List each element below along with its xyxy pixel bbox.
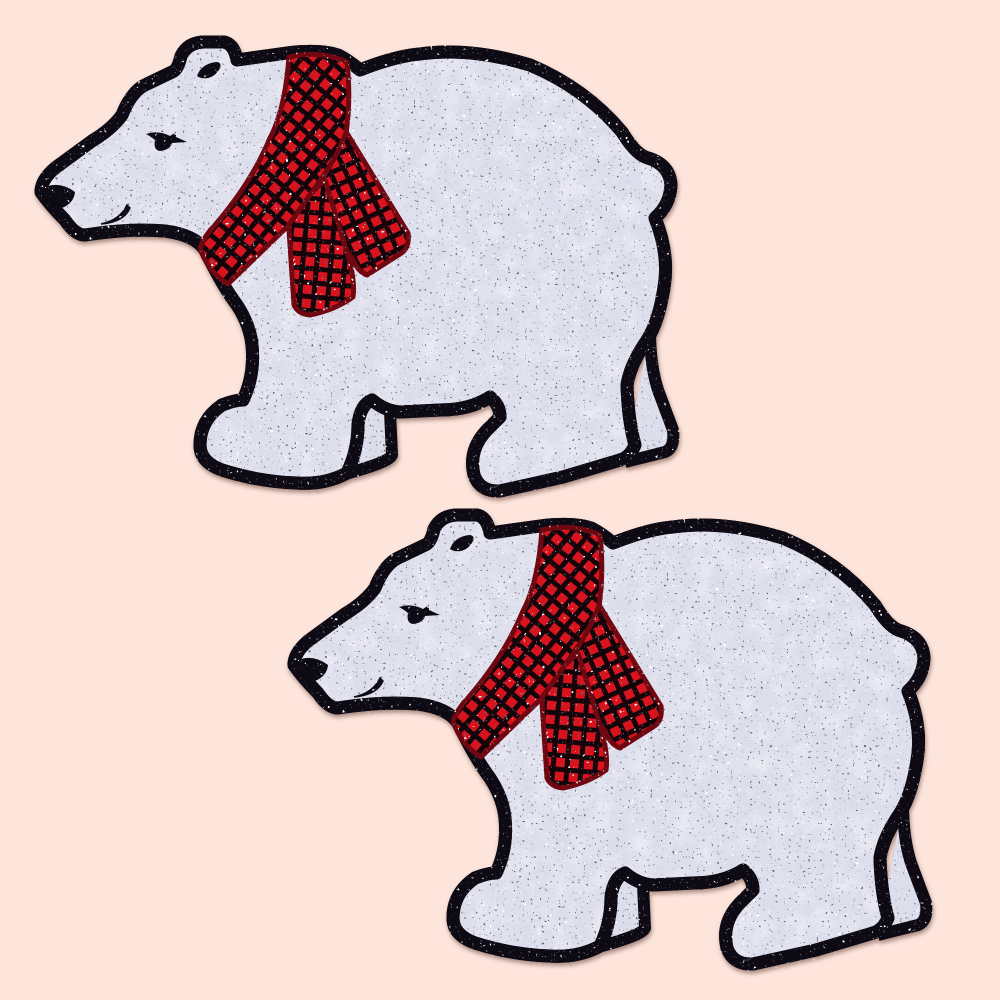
nose [44,185,75,208]
ear [197,62,220,78]
body outline [41,42,671,491]
scarf: middle tail [288,180,354,315]
scarf [200,54,408,315]
bear: upper [41,42,673,491]
bear silhouette [41,42,673,491]
back leg [625,330,673,462]
scarf: neck band [200,54,349,284]
front far leg [345,402,392,474]
body fill [41,42,671,491]
bear: lower [294,515,926,964]
fur mottling [41,42,671,491]
scarf: right tail [300,130,408,275]
smile [101,205,130,224]
eye and brow [146,132,187,151]
glitter overlay [41,42,673,491]
